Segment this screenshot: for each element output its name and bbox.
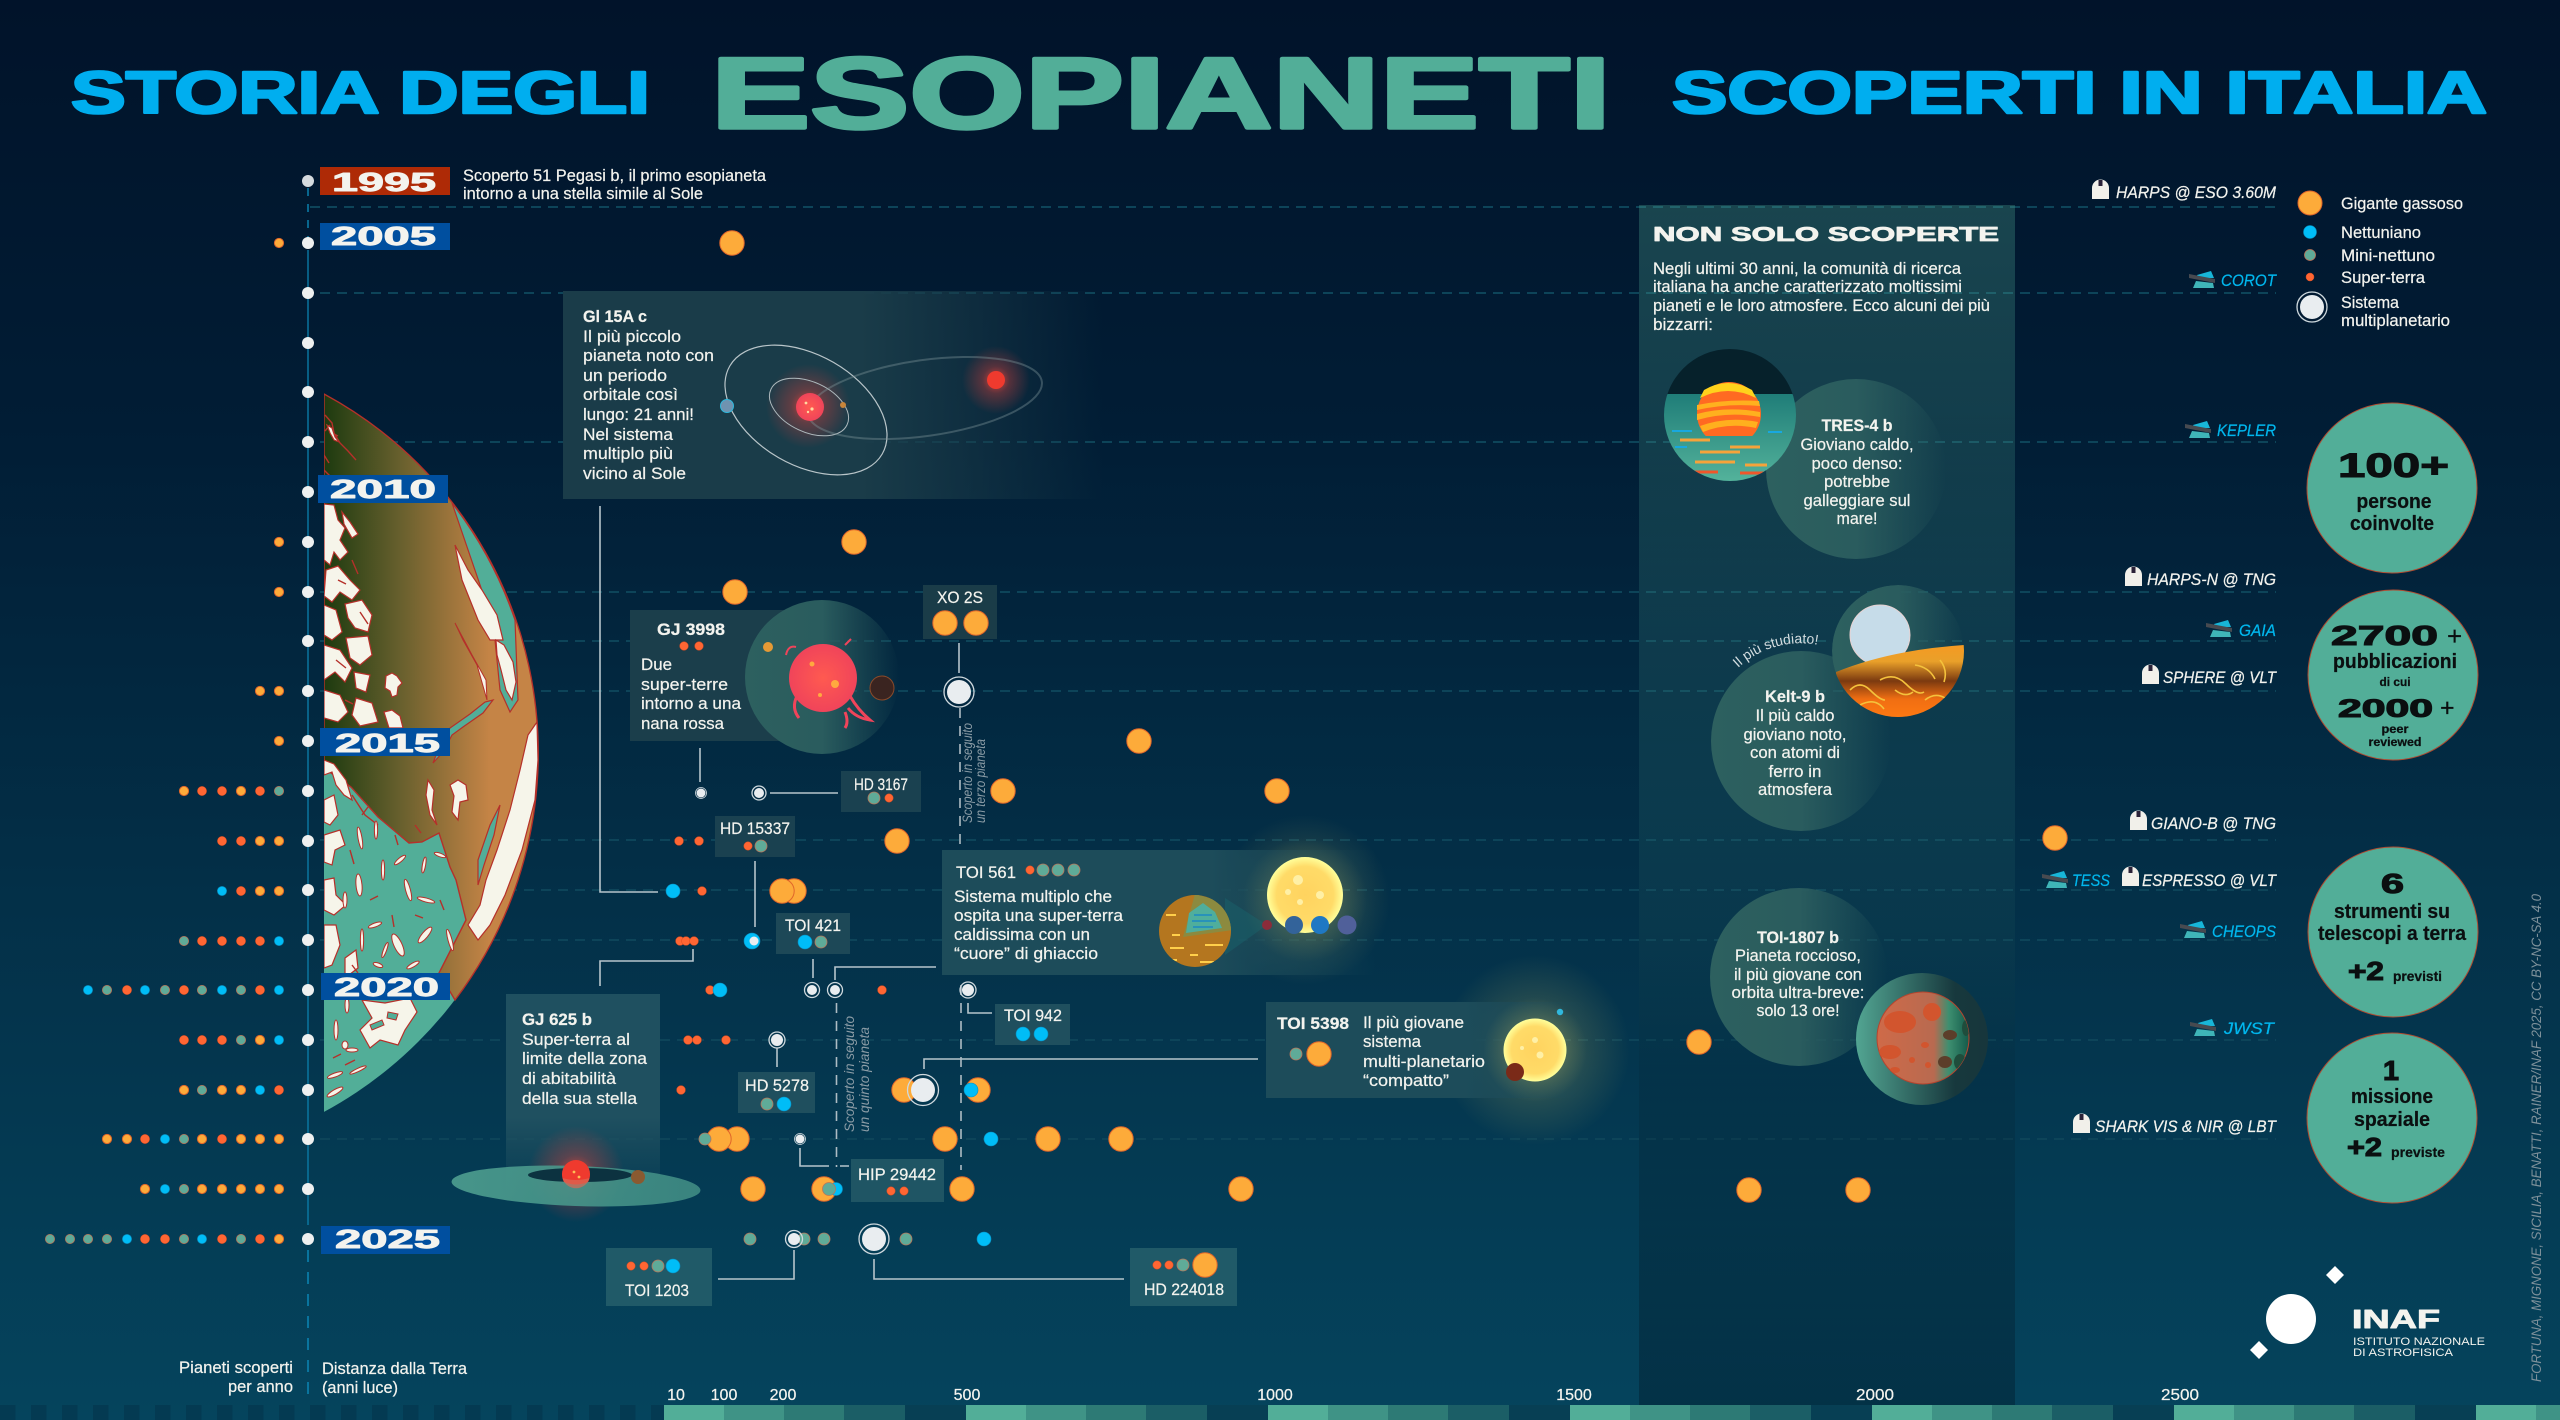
illustration: red dwarf with planets xyxy=(763,639,894,728)
box: TOI 1203 xyxy=(606,1248,712,1306)
legend: Nettuniano xyxy=(2341,223,2421,242)
stat: 1 missione spaziale: previste xyxy=(2391,1144,2445,1160)
leader lines xyxy=(600,506,1258,1279)
legend: Sistema xyxy=(2341,293,2400,312)
intro text xyxy=(1653,259,1990,334)
instrument: GIANO-B @ TNG: GIANO-B @ TNG xyxy=(2151,814,2276,833)
title: STORIA DEGLI xyxy=(71,60,650,126)
bubble: Kelt-9 b: con atomi di xyxy=(1750,743,1840,762)
bubble: Kelt-9 b: Kelt-9 b xyxy=(1765,687,1825,706)
panel: TOI 561: “cuore” di ghiaccio xyxy=(954,944,1098,963)
stat: 1 missione spaziale xyxy=(2307,1033,2477,1203)
legend: Mini-nettuno xyxy=(2341,246,2435,265)
bubble: TRES-4 b: Gioviano caldo, xyxy=(1800,435,1914,454)
illustration: Kelt-9 b with star xyxy=(1832,585,1964,720)
instrument: HARPS @ ESO 3.60M: HARPS @ ESO 3.60M xyxy=(2116,183,2277,202)
bubble: TOI-1807 b: il più giovane con xyxy=(1734,965,1862,984)
instrument: JWST xyxy=(2190,1019,2276,1038)
stat: 100+ persone coinvolte: persone xyxy=(2356,491,2432,513)
logo: INAF: DI ASTROFISICA xyxy=(2353,1347,2454,1359)
illustration: Earth xyxy=(324,393,539,1112)
panel: Gl 15A c: pianeta noto con xyxy=(583,346,714,365)
bubble: Kelt-9 b: Il più caldo xyxy=(1756,706,1834,725)
instrument guide lines xyxy=(310,207,2276,1139)
instrument: GIANO-B @ TNG xyxy=(2130,810,2276,833)
instrument: SHARK VIS & NIR @ LBT: SHARK VIS & NIR @ LBT xyxy=(2095,1117,2277,1136)
panel: Gl 15A c: Nel sistema xyxy=(583,425,674,444)
box: TOI 942 xyxy=(995,1004,1070,1045)
box: HIP 29442 xyxy=(851,1159,944,1202)
panel: GJ 625 b: della sua stella xyxy=(522,1089,638,1108)
text: 51 Pegasi b note xyxy=(463,166,767,203)
distance axis labels xyxy=(667,1387,2199,1404)
logo: INAF: ISTITUTO NAZIONALE xyxy=(2353,1336,2485,1348)
box: HIP 29442: HIP 29442 xyxy=(858,1165,936,1184)
box: HD 224018 xyxy=(1130,1248,1237,1306)
panel: GJ 3998 xyxy=(630,600,899,754)
rotated notes on later discoveries: un quinto pianeta xyxy=(856,1027,872,1132)
instrument: COROT xyxy=(2189,271,2277,290)
illustration: GJ 625 habitable zone disk xyxy=(451,1126,701,1222)
instrument: CHEOPS xyxy=(2180,921,2277,941)
axis captions: Pianeti scoperti xyxy=(179,1358,293,1377)
stat: 6 strumenti su telescopi a terra xyxy=(2308,847,2478,1017)
panel: TOI 5398: Il più giovane xyxy=(1363,1013,1464,1032)
legend: multiplanetario xyxy=(2341,311,2450,330)
instrument: HARPS @ ESO 3.60M xyxy=(2092,180,2277,202)
title xyxy=(71,38,2487,150)
box: XO 2S: XO 2S xyxy=(937,588,983,607)
distance axis labels: 10 xyxy=(667,1387,685,1404)
instrument: GAIA xyxy=(2206,620,2276,640)
panel: TOI 561: ospita una super-terra xyxy=(954,906,1124,925)
panel: GJ 3998: intorno a una xyxy=(641,694,742,713)
instrument: ESPRESSO @ VLT xyxy=(2122,866,2277,890)
bubble: TRES-4 b: poco denso: xyxy=(1812,454,1902,473)
panel: GJ 3998: super-terre xyxy=(641,675,728,694)
bubble: TRES-4 b: TRES-4 b xyxy=(1822,416,1892,435)
box: XO 2S xyxy=(923,585,997,639)
stat: 2700+ pubblicazioni xyxy=(2308,590,2478,760)
distance axis labels: 2000 xyxy=(1856,1387,1894,1404)
legend xyxy=(2297,191,2463,330)
axis captions: Distanza dalla Terra xyxy=(322,1359,468,1378)
instrument: SPHERE @ VLT: SPHERE @ VLT xyxy=(2163,668,2277,687)
box: HD 224018: HD 224018 xyxy=(1144,1280,1224,1299)
logo: INAF xyxy=(2250,1266,2485,1359)
instrument: SPHERE @ VLT xyxy=(2142,664,2277,687)
panel: TOI 5398: multi-planetario xyxy=(1363,1052,1485,1071)
stat: 1 missione spaziale: 1 xyxy=(2383,1055,2399,1086)
bubble: TRES-4 b xyxy=(1766,379,1946,559)
box: HD 5278: HD 5278 xyxy=(745,1076,809,1095)
box: TOI 1203: TOI 1203 xyxy=(625,1281,689,1300)
instrument: HARPS-N @ TNG xyxy=(2125,566,2276,589)
distance axis labels: 2500 xyxy=(2161,1387,2199,1404)
illustration: TOI-1807 b planet xyxy=(1856,973,1988,1105)
year labels: 2015 xyxy=(335,728,440,758)
year labels xyxy=(318,167,450,1254)
bubble: Kelt-9 b xyxy=(1711,651,1891,831)
stat: 2700+ pubblicazioni: reviewed xyxy=(2368,735,2422,749)
stat: 100+ persone coinvolte: 100+ xyxy=(2338,447,2449,485)
axis captions: per anno xyxy=(228,1377,293,1396)
distance axis labels: 500 xyxy=(954,1387,980,1404)
stat: 100+ persone coinvolte: coinvolte xyxy=(2350,513,2434,535)
panel: GJ 625 b xyxy=(451,994,701,1222)
stat: 1 missione spaziale: spaziale xyxy=(2354,1109,2430,1131)
instrument: ESPRESSO @ VLT: ESPRESSO @ VLT xyxy=(2142,871,2277,890)
stat: 2700+ pubblicazioni: 2000 xyxy=(2338,695,2433,723)
year labels: 2020 xyxy=(334,972,439,1002)
bubble: TOI-1807 b: Pianeta roccioso, xyxy=(1735,946,1861,965)
rotated notes on later discoveries: Scoperto in seguito xyxy=(959,723,975,823)
panel: Gl 15A c: orbitale così xyxy=(583,385,678,404)
instrument: TESS xyxy=(2042,871,2111,890)
box: TOI 942: TOI 942 xyxy=(1004,1006,1062,1025)
panel: GJ 625 b: GJ 625 b xyxy=(522,1010,592,1029)
timeline axis xyxy=(302,175,314,1395)
bubble: TRES-4 b: mare! xyxy=(1836,509,1878,528)
panel: Gl 15A c: vicino al Sole xyxy=(583,464,686,483)
stat: 2700+ pubblicazioni: di cui xyxy=(2380,675,2410,689)
intro text: italiana ha anche caratterizzato moltissimi xyxy=(1653,277,1962,296)
credit: FORTUNA, MIGNONE, SICILIA, BENATTI, RAINER/INAF 2025, CC BY-NC-SA 4.0 xyxy=(2528,894,2544,1382)
text: 51 Pegasi b note: Scoperto 51 Pegasi b, il primo esopianeta xyxy=(463,166,767,185)
instrument: GAIA: GAIA xyxy=(2239,621,2276,640)
instrument: KEPLER: KEPLER xyxy=(2217,421,2276,440)
box: HD 15337: HD 15337 xyxy=(720,819,790,838)
panel: TOI 561: TOI 561 xyxy=(956,863,1016,882)
box: HD 3167: HD 3167 xyxy=(854,775,908,794)
legend: Super-terra xyxy=(2341,268,2426,287)
title: SCOPERTI IN ITALIA xyxy=(1672,60,2487,126)
side panel: non solo scoperte xyxy=(1639,205,2015,1405)
bubble: Kelt-9 b: ferro in xyxy=(1768,762,1822,781)
rotated notes on later discoveries: un terzo pianeta xyxy=(972,739,988,823)
axis captions xyxy=(179,1358,468,1397)
year labels: 2025 xyxy=(335,1224,440,1254)
multiplanetary system markers xyxy=(696,677,976,1254)
intro text: pianeti e le loro atmosfere. Ecco alcuni dei più xyxy=(1653,296,1990,315)
year labels: 2005 xyxy=(331,221,436,251)
distance axis labels: 100 xyxy=(711,1387,737,1404)
year labels: 1995 xyxy=(332,167,436,197)
stat: 2700+ pubblicazioni: + xyxy=(2440,694,2455,722)
bubble: Kelt-9 b: atmosfera xyxy=(1758,780,1833,799)
stat: 6 strumenti su telescopi a terra: +2 xyxy=(2348,956,2384,986)
box: HD 15337 xyxy=(715,816,795,857)
year labels: 2010 xyxy=(330,474,436,504)
panel: Gl 15A c: multiplo più xyxy=(583,444,673,463)
stat: 6 strumenti su telescopi a terra: previsti xyxy=(2393,968,2442,984)
intro text: bizzarri: xyxy=(1653,315,1713,334)
logo: INAF: INAF xyxy=(2352,1304,2440,1334)
annotation: il più studiato: Il più studiato! xyxy=(1732,634,1818,668)
stat: 2700+ pubblicazioni: pubblicazioni xyxy=(2333,651,2457,673)
planets scatter by distance xyxy=(666,231,2067,1246)
instrument: COROT: COROT xyxy=(2221,271,2277,290)
bubble: Kelt-9 b: gioviano noto, xyxy=(1744,725,1846,744)
rotated notes on later discoveries: Scoperto in seguito xyxy=(841,1016,857,1132)
illustration: TOI 5398 star xyxy=(1504,1009,1566,1082)
stat: 100+ persone coinvolte xyxy=(2307,403,2477,573)
text: 51 Pegasi b note: intorno a una stella simile al Sole xyxy=(463,184,703,203)
instrument: TESS: TESS xyxy=(2072,871,2111,890)
box: HD 5278 xyxy=(738,1072,815,1113)
intro text: Negli ultimi 30 anni, la comunità di ricerca xyxy=(1653,259,1962,278)
panel: GJ 3998: Due xyxy=(641,655,672,674)
panel: Gl 15A c: Gl 15A c xyxy=(583,307,647,326)
panel: TOI 561: caldissima con un xyxy=(954,925,1090,944)
illustration: TOI 561 star and planet interior xyxy=(1159,857,1356,967)
planets discovered per year dots xyxy=(45,238,284,1244)
legend: Gigante gassoso xyxy=(2341,194,2463,213)
panel: GJ 625 b: limite della zona xyxy=(522,1049,648,1068)
box: HD 3167 xyxy=(841,771,921,812)
title: ESOPIANETI xyxy=(711,38,1611,150)
panel: Gl 15A c xyxy=(563,291,1103,502)
bubble: TRES-4 b: galleggiare sul xyxy=(1804,491,1910,510)
illustration: Gl 15 orbital system xyxy=(702,318,1047,502)
distance axis labels: 1000 xyxy=(1257,1387,1293,1404)
bubble: TRES-4 b: potrebbe xyxy=(1824,472,1890,491)
distance axis labels: 200 xyxy=(770,1387,796,1404)
panel: GJ 3998: GJ 3998 xyxy=(657,620,725,639)
stat: 1 missione spaziale: +2 xyxy=(2347,1132,2382,1162)
panel: Gl 15A c: un periodo xyxy=(583,366,667,385)
panel: GJ 625 b: di abitabilità xyxy=(522,1069,617,1088)
panel: TOI 5398: “compatto” xyxy=(1363,1071,1449,1090)
bubble: TOI-1807 b xyxy=(1710,888,1888,1066)
instrument: HARPS-N @ TNG: HARPS-N @ TNG xyxy=(2147,570,2276,589)
instrument: JWST: JWST xyxy=(2223,1019,2276,1038)
bubble: TOI-1807 b: orbita ultra-breve: xyxy=(1732,983,1864,1002)
stat: 1 missione spaziale: missione xyxy=(2351,1086,2433,1108)
panel: Gl 15A c: Il più piccolo xyxy=(583,327,681,346)
panel: TOI 5398: sistema xyxy=(1363,1032,1422,1051)
distance axis labels: 1500 xyxy=(1556,1387,1592,1404)
panel: Gl 15A c: lungo: 21 anni! xyxy=(583,405,694,424)
box: TOI 421 xyxy=(776,913,850,954)
axis captions: (anni luce) xyxy=(322,1378,398,1397)
instrument: KEPLER xyxy=(2185,421,2276,440)
stat: 2700+ pubblicazioni: + xyxy=(2447,621,2462,651)
stat: 2700+ pubblicazioni: peer xyxy=(2382,722,2409,736)
stat: 2700+ pubblicazioni: 2700 xyxy=(2331,620,2438,651)
panel: TOI 5398: TOI 5398 xyxy=(1277,1014,1349,1033)
bubble: TOI-1807 b: solo 13 ore! xyxy=(1756,1001,1840,1020)
panel: TOI 5398 xyxy=(1266,955,1630,1145)
panel: GJ 3998: nana rossa xyxy=(641,714,725,733)
stat: 6 strumenti su telescopi a terra: telescopi a terra xyxy=(2318,923,2467,945)
stat: 6 strumenti su telescopi a terra: strumenti su xyxy=(2334,901,2450,923)
panel: TOI 561 xyxy=(942,828,1378,975)
stat: 6 strumenti su telescopi a terra: 6 xyxy=(2381,868,2404,899)
rotated notes on later discoveries xyxy=(841,723,988,1132)
heading: non solo scoperte: NON SOLO SCOPERTE xyxy=(1653,224,1999,246)
illustration: planet floating on sea xyxy=(1664,349,1796,481)
panel: TOI 561: Sistema multiplo che xyxy=(954,887,1112,906)
panel: GJ 625 b: Super-terra al xyxy=(522,1030,630,1049)
box: TOI 421: TOI 421 xyxy=(785,916,841,935)
bubble: TOI-1807 b: TOI-1807 b xyxy=(1757,928,1839,947)
instrument: CHEOPS: CHEOPS xyxy=(2212,922,2277,941)
distance axis strip xyxy=(0,1405,2560,1420)
